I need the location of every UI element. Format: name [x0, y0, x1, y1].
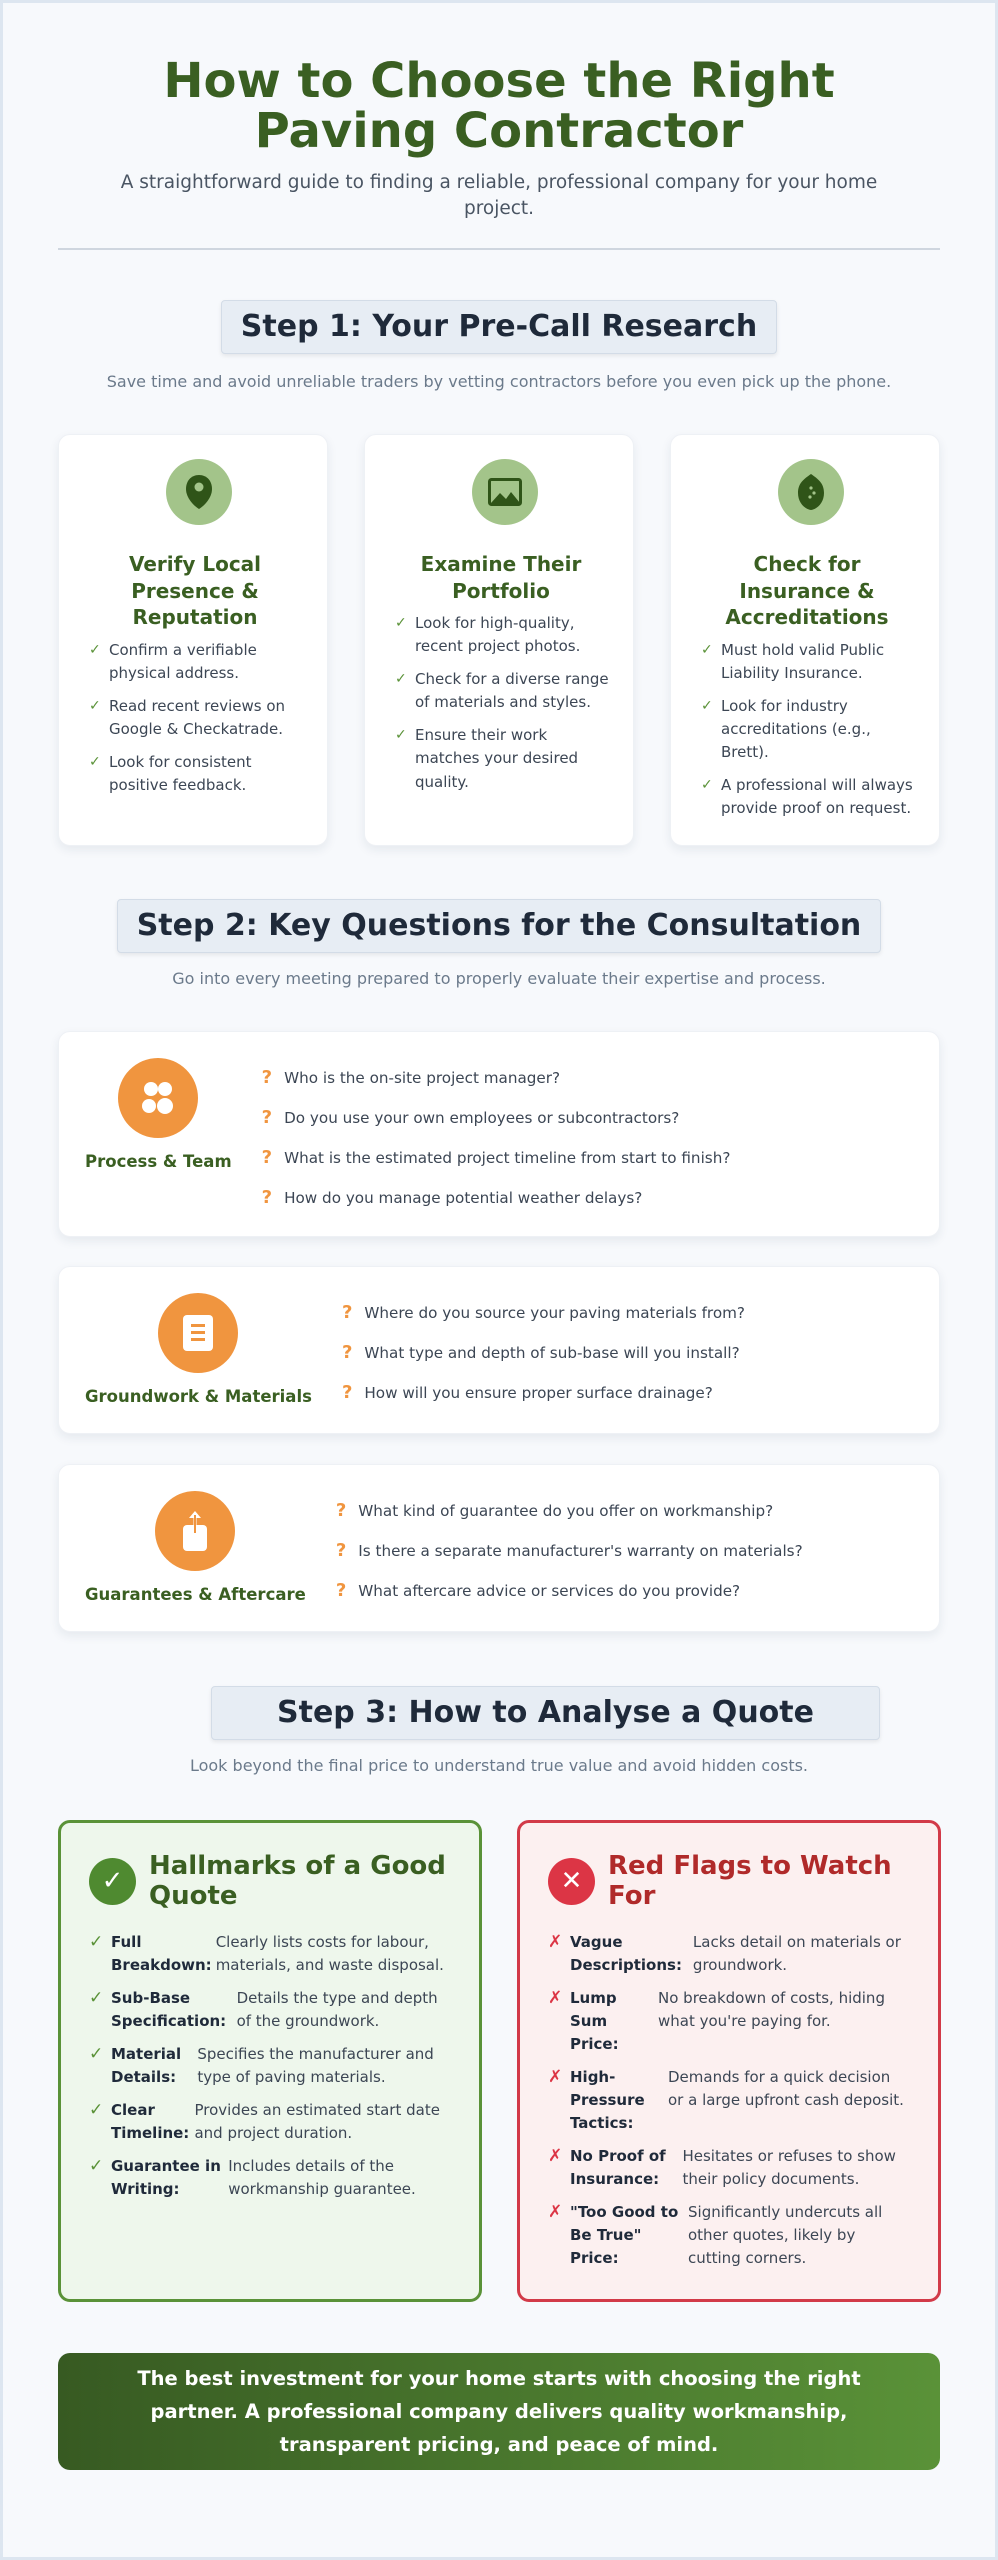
- hallmarks list: Full Breakdown:: [111, 1933, 212, 1974]
- hallmarks list: Specifies the manufacturer and type of paving materials.: [197, 2045, 434, 2086]
- red flags list: Significantly undercuts all other quotes, likely by cutting corners.: [688, 2203, 882, 2267]
- red flags list: Lacks detail on materials or groundwork.: [693, 1933, 901, 1974]
- red flags list: High-Pressure Tactics:: [570, 2068, 645, 2132]
- title: Paving Contractor: [255, 103, 743, 159]
- hallmarks list: Provides an estimated start date and project duration.: [194, 2101, 440, 2142]
- red flags list: Demands for a quick decision or a large upfront cash deposit.: [668, 2068, 904, 2109]
- hallmarks list: Guarantee in Writing:: [111, 2157, 221, 2198]
- questions list: ? How do you manage potential weather delays?: [262, 1187, 642, 1208]
- hallmarks list: ✓: [89, 2156, 103, 2176]
- title: How to Choose the Right: [163, 53, 835, 109]
- red flags list: "Too Good to Be True" Price:: [570, 2203, 678, 2267]
- card title: Examine Their Portfolio: [421, 552, 581, 602]
- category: groundwork: [85, 1293, 312, 1406]
- hallmarks list: ✓: [89, 2100, 103, 2120]
- hallmarks list: Clear Timeline:: [111, 2101, 189, 2142]
- step 1 description: Save time and avoid unreliable traders by vetting contractors before you even pick up the phone.: [107, 372, 891, 391]
- hallmarks list: Sub-Base Specification:: [111, 1989, 226, 2030]
- questions list: ? Who is the on-site project manager?: [262, 1067, 560, 1088]
- questions list: ? Where do you source your paving materials from?: [342, 1302, 745, 1323]
- questions list: ? Is there a separate manufacturer's warranty on materials?: [336, 1540, 803, 1561]
- heading: step 2: Step 2: Key Questions for the Consultation: [137, 908, 861, 943]
- questions list: ? What kind of guarantee do you offer on workmanship?: [336, 1500, 773, 1521]
- questions list: [342, 1302, 745, 1403]
- icon: location pin: [166, 459, 232, 525]
- category: groundwork: Groundwork & Materials: [85, 1387, 312, 1406]
- questions list: ? What type and depth of sub-base will you install?: [342, 1342, 740, 1363]
- card: examine portfolio: [364, 434, 634, 846]
- card: verify local presence: [58, 434, 328, 846]
- category: guarantees: Guarantees & Aftercare: [85, 1585, 306, 1604]
- category: process & team: Process & Team: [85, 1152, 232, 1171]
- questions list: [262, 1067, 730, 1208]
- questions list: ? What is the estimated project timeline from start to finish?: [262, 1147, 730, 1168]
- hallmarks list: Clearly lists costs for labour, materials, and waste disposal.: [216, 1933, 444, 1974]
- heading: step 2: [117, 899, 881, 953]
- icon: image: [472, 459, 538, 525]
- step 3 description: Look beyond the final price to understand true value and avoid hidden costs.: [190, 1756, 808, 1775]
- heading: step 3: [211, 1686, 880, 1740]
- heading: step 3: Step 3: How to Analyse a Quote: [277, 1695, 814, 1730]
- heading: step 1: [221, 300, 777, 354]
- panel header: Hallmarks of a Good Quote: [149, 1851, 446, 1911]
- icon: shield: [778, 459, 844, 525]
- bullet list: [397, 614, 609, 791]
- red flags list: ✗: [548, 2202, 562, 2222]
- step 2 description: Go into every meeting prepared to properly evaluate their expertise and process.: [172, 969, 826, 988]
- card title: Verify Local Presence & Reputation: [129, 552, 261, 629]
- hallmarks list: ✓: [89, 1988, 103, 2008]
- bullet list: Confirm a verifiable physical address.: [109, 640, 257, 682]
- hallmarks list: Includes details of the workmanship guarantee.: [228, 2157, 416, 2198]
- card: insurance: [670, 434, 940, 846]
- footer callout: The best investment for your home starts with choosing the right partner. A professional company delivers quality workmanship, transparent pricing, and peace of mind.: [137, 2367, 861, 2456]
- bullet list: Must hold valid Public Liability Insurance.: [721, 640, 884, 682]
- card: guarantees: [58, 1464, 940, 1632]
- red flags list: ✗: [548, 2146, 562, 2166]
- heading: step 1: Step 1: Your Pre-Call Research: [241, 309, 757, 344]
- bullet list: [703, 640, 913, 817]
- questions list: ? How will you ensure proper surface drainage?: [342, 1382, 713, 1403]
- red flags list: No breakdown of costs, hiding what you're paying for.: [658, 1989, 885, 2030]
- red flags list: ✗: [548, 2067, 562, 2087]
- panel: red flags: [517, 1820, 941, 2302]
- card: process & team: [58, 1031, 940, 1237]
- bullet list: Ensure their work matches your desired quality.: [415, 726, 578, 791]
- red flags list: ✗: [548, 1988, 562, 2008]
- footer callout: [58, 2353, 940, 2470]
- red flags list: [548, 1932, 904, 2267]
- panel header: ✓: [102, 1866, 123, 1896]
- red flags list: Vague Descriptions:: [570, 1933, 682, 1974]
- card: groundwork & materials: [58, 1266, 940, 1434]
- bullet list: [91, 640, 285, 794]
- card title: Check for Insurance & Accreditations: [725, 552, 889, 629]
- panel header: ✕: [561, 1866, 582, 1896]
- hallmarks list: ✓: [89, 1932, 103, 1952]
- questions list: ? Do you use your own employees or subcontractors?: [262, 1107, 679, 1128]
- title: [163, 53, 835, 159]
- questions list: ? What aftercare advice or services do you provide?: [336, 1580, 740, 1601]
- bullet list: Look for industry accreditations (e.g., Brett).: [721, 697, 871, 761]
- category: process & team: [85, 1058, 232, 1171]
- questions list: [336, 1500, 803, 1601]
- hallmarks list: [89, 1932, 444, 2198]
- red flags list: Hesitates or refuses to show their policy documents.: [682, 2147, 896, 2188]
- bullet list: Read recent reviews on Google & Checkatrade.: [109, 697, 285, 738]
- red flags list: ✗: [548, 1932, 562, 1952]
- hallmarks list: ✓: [89, 2044, 103, 2064]
- red flags list: Lump Sum Price:: [570, 1989, 619, 2053]
- category: guarantees: [85, 1491, 306, 1604]
- panel header: Red Flags to Watch For: [608, 1851, 892, 1911]
- subtitle: A straightforward guide to finding a reliable, professional company for your home project.: [121, 172, 877, 219]
- hallmarks list: Material Details:: [111, 2045, 181, 2086]
- panel: good quote: [58, 1820, 482, 2302]
- bullet list: A professional will always provide proof on request.: [721, 776, 913, 817]
- bullet list: Check for a diverse range of materials and styles.: [415, 670, 609, 711]
- bullet list: Look for high-quality, recent project photos.: [415, 614, 580, 655]
- red flags list: No Proof of Insurance:: [570, 2147, 666, 2188]
- bullet list: Look for consistent positive feedback.: [109, 753, 252, 794]
- hallmarks list: Details the type and depth of the groundwork.: [237, 1989, 438, 2030]
